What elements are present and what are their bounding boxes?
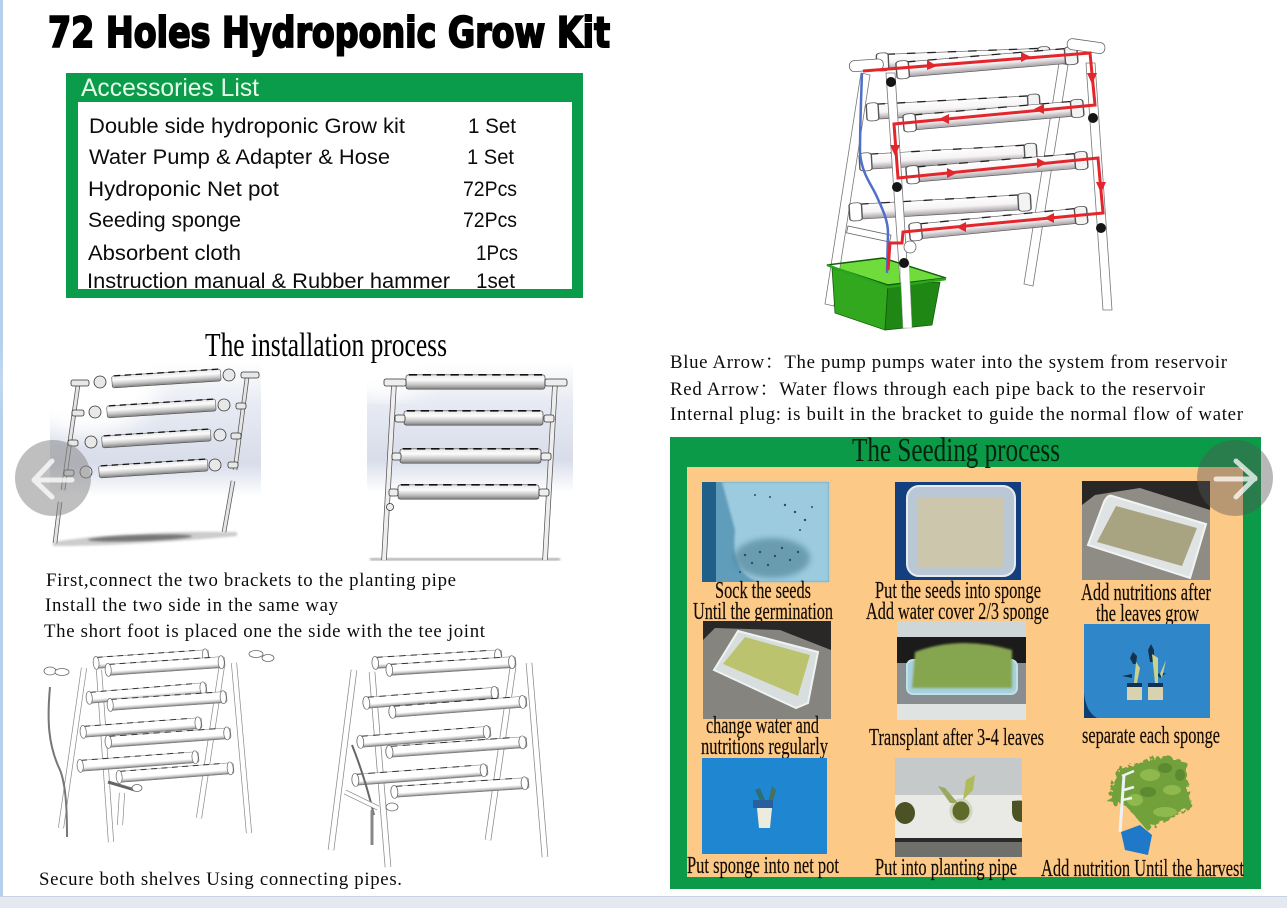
diagram: shelves joined by connecting pipes — [331, 649, 545, 867]
red flow arrowheads — [890, 52, 1106, 232]
photo 6: separated sponges — [1084, 624, 1210, 718]
front pipes — [896, 46, 1088, 241]
flow legend text: Blue Arrow：The pump pumps water into the system from reservoir — [670, 352, 1228, 373]
flow legend text: Internal plug: is built in the bracket to guide the normal flow of water — [670, 404, 1244, 425]
caption 2: Add water cover 2/3 sponge — [866, 599, 1049, 625]
accessories rows: 72Pcs — [463, 208, 517, 232]
reservoir back rim — [827, 258, 946, 285]
heading: the installation process: The installation process — [205, 327, 447, 364]
caption 3: Add nutritions after — [1081, 580, 1211, 606]
caption 7: Put sponge into net pot — [687, 853, 839, 879]
panel: accessories list — [66, 73, 583, 298]
caption 4: change water and — [706, 713, 819, 739]
front legs — [886, 63, 1112, 327]
caption 5: Transplant after 3-4 leaves — [869, 725, 1044, 751]
diagram: water flow through the system — [825, 38, 1112, 330]
accessories rows: 1set — [476, 269, 515, 293]
accessories rows: Double side hydroponic Grow kit — [89, 114, 405, 138]
diagram: exploded bracket and planting pipes — [10, 325, 261, 546]
photo 1: soaked seeds — [702, 482, 829, 582]
panel: seeding process — [670, 432, 1261, 889]
photo 8: plant in pipe — [895, 758, 1022, 857]
blue arrow: pump hose — [860, 73, 888, 273]
installation text: steps one to three — [44, 570, 486, 642]
front leg into bucket — [900, 262, 912, 328]
accessories heading: Accessories List — [81, 74, 259, 102]
seeding heading: The Seeding process — [852, 432, 1060, 469]
accessories rows: Absorbent cloth — [88, 241, 241, 265]
caption 3: the leaves grow — [1096, 601, 1199, 627]
accessories rows: Instruction manual & Rubber hammer — [87, 269, 450, 293]
photo 3: germinating seeds on tray — [1082, 481, 1210, 580]
accessories rows: 1 Set — [467, 145, 514, 169]
photo 2: sponge in tray — [895, 482, 1021, 580]
accessories rows — [87, 114, 518, 293]
installation text: steps one to three: Install the two side in the same way — [45, 595, 339, 616]
caption 4: nutritions regularly — [701, 734, 828, 760]
frame legs — [825, 63, 1068, 306]
accessories rows: 72Pcs — [463, 177, 517, 201]
flow legend text: Red Arrow：Water flows through each pipe back to the reservoir — [670, 379, 1206, 400]
diagram: assembled bracket with planting pipes — [340, 342, 573, 560]
installation text: steps one to three: The short foot is placed one the side with the tee joint — [44, 621, 486, 642]
accessories rows: Seeding sponge — [88, 208, 241, 232]
caption 1: Sock the seeds — [715, 578, 811, 604]
photo 4: sprouts on tray — [703, 621, 831, 719]
tee joints — [847, 38, 1106, 253]
internal plugs — [886, 77, 1106, 268]
arrow: previous slide — [15, 440, 91, 516]
accessories rows: 1 Set — [468, 114, 516, 138]
photo 9: mature plants on rack — [1108, 755, 1192, 855]
caption 2: Put the seeds into sponge — [875, 578, 1041, 604]
title: 72 Holes Hydroponic Grow Kit — [48, 8, 610, 57]
photo 7: sponge in net pot — [702, 758, 827, 854]
installation text: step four: Secure both shelves Using connecting pipes. — [39, 869, 402, 890]
caption 1: Until the germination — [693, 599, 833, 625]
accessories rows: Hydroponic Net pot — [88, 177, 279, 201]
caption 6: separate each sponge — [1082, 723, 1220, 749]
red arrow: return path — [863, 53, 1103, 270]
reservoir bucket — [827, 258, 946, 330]
accessories rows: 1Pcs — [476, 241, 518, 265]
photo 5: seedlings transplanted — [897, 621, 1026, 720]
installation text: steps one to three: First,connect the two brackets to the planting pipe — [46, 570, 456, 591]
caption 8: Put into planting pipe — [875, 855, 1017, 881]
accessories rows: Water Pump & Adapter & Hose — [89, 145, 390, 169]
diagram: shelves before connecting — [44, 649, 274, 842]
arrow: next slide — [1197, 440, 1273, 516]
flow legend text — [670, 352, 1244, 425]
back pipes — [849, 46, 1050, 221]
